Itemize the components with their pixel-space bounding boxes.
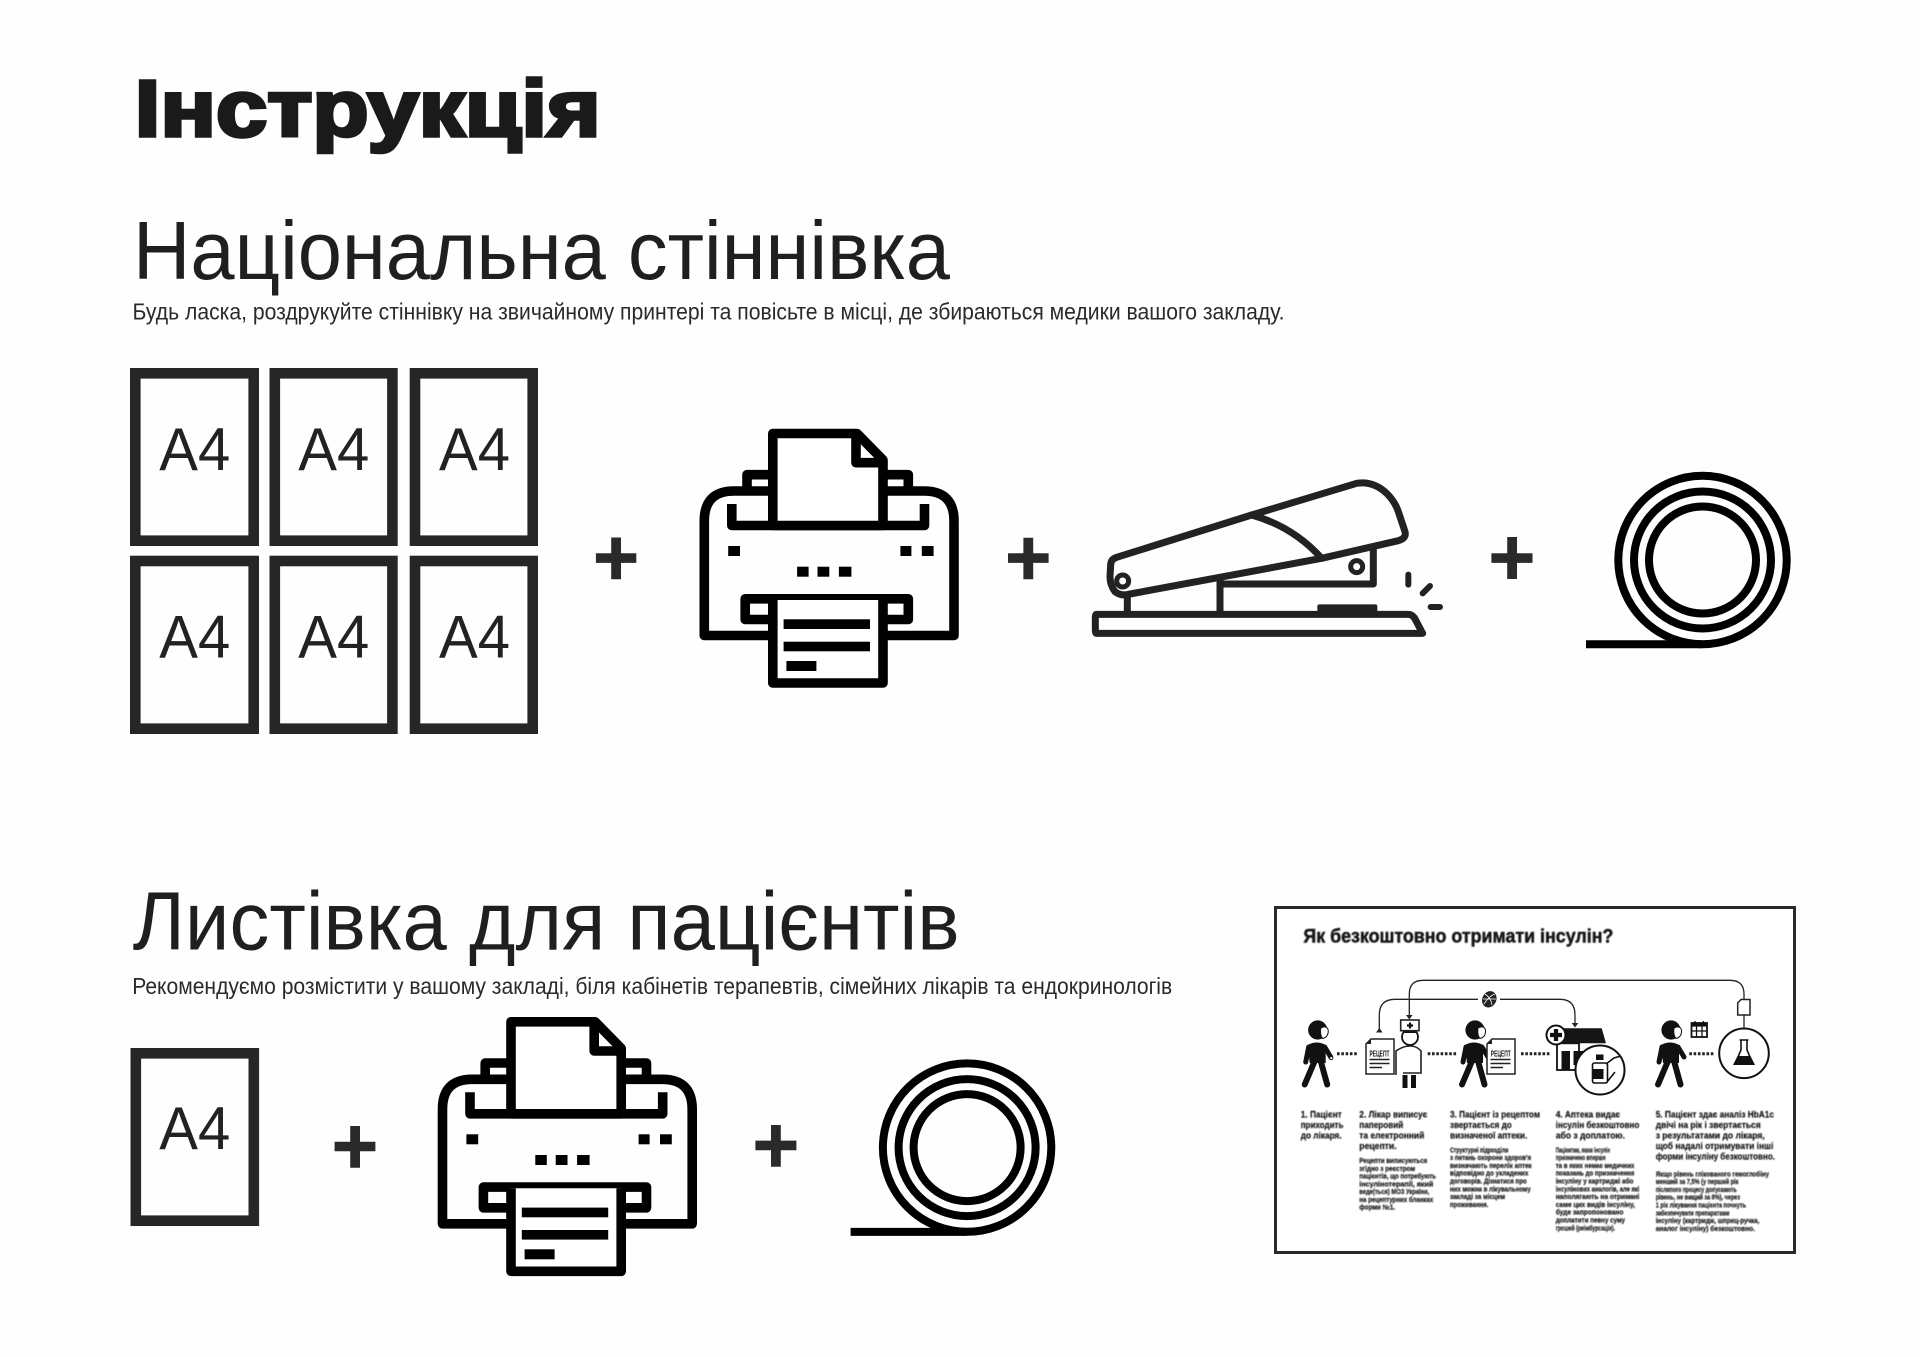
- step 3 text: проживання.: [1450, 1202, 1488, 1209]
- icon: single A4 sheet: [136, 1053, 254, 1221]
- icon group: six A4 sheets: A4: [298, 604, 369, 671]
- preview arrow 2: [1428, 1052, 1457, 1055]
- icon: printer 2: [442, 1022, 692, 1271]
- preview connector lines: [1376, 980, 1744, 1032]
- step 3 text: з питань охорони здоров'я: [1450, 1155, 1531, 1162]
- preview icon: globe: [1478, 989, 1500, 1010]
- preview icon: document on lab line: [1738, 1000, 1750, 1015]
- title: Інструкція: [135, 64, 601, 153]
- step 3 text: відповідно до укладених: [1450, 1170, 1528, 1178]
- preview arrow 1: [1337, 1052, 1357, 1055]
- icon group: six A4 sheets: A4: [159, 604, 230, 671]
- icon group: six A4 sheets: A4: [439, 604, 510, 671]
- preview icon: pharmacy: [1546, 1026, 1624, 1094]
- step 3 text: [1450, 1108, 1540, 1209]
- preview title: Як безкоштовно отримати інсулін?: [1303, 927, 1613, 948]
- step 2 text: та електронний: [1359, 1130, 1425, 1140]
- panel: leaflet preview: [1276, 908, 1794, 1252]
- step 5 text: 1 рік лікування пацієнта почнуть: [1656, 1202, 1746, 1210]
- step 4 text: наполягають на отримані: [1556, 1193, 1639, 1201]
- step 2 text: форми №1.: [1359, 1204, 1395, 1212]
- icon group: six A4 sheets: A4: [439, 416, 510, 483]
- step 4 text: буде запропоновано: [1556, 1209, 1623, 1217]
- step 4 text: [1556, 1108, 1640, 1232]
- step 1 text: 1. Пацієнт: [1301, 1108, 1342, 1120]
- preview icon: patient 1: [1305, 1020, 1333, 1084]
- step 3 text: 3. Пацієнт із рецептом: [1450, 1108, 1540, 1120]
- step 5 text: забезпечувати препаратами: [1656, 1209, 1729, 1217]
- step 5 text: рівень, не вищий за 8%), через: [1656, 1194, 1740, 1202]
- icon: printer: [704, 434, 954, 683]
- step 4 text: 4. Аптека видає: [1556, 1108, 1620, 1120]
- step 4 text: призначено вперше: [1556, 1155, 1606, 1162]
- step 5 text: інсуліну (картридж, шприц-ручка,: [1656, 1217, 1759, 1225]
- step 3 text: визначають перелік аптек: [1450, 1162, 1532, 1170]
- preview icon: prescription 2: РЕЦЕПТ: [1491, 1048, 1511, 1058]
- step 5 text: Якщо рівень глікованого гемоглобіну: [1656, 1170, 1769, 1178]
- preview icon: prescription 2: [1487, 1039, 1515, 1074]
- icon group: six A4 sheets: [135, 373, 533, 729]
- preview arrow 3: [1521, 1052, 1550, 1055]
- step 5 text: менший за 7,5% (у перший рік: [1656, 1178, 1739, 1186]
- step 3 text: звертається до: [1450, 1119, 1512, 1130]
- step 3 text: визначеної аптеки.: [1450, 1130, 1527, 1140]
- step 5 text: з результатами до лікаря,: [1656, 1130, 1765, 1140]
- step 2 text: рецепти.: [1359, 1140, 1397, 1151]
- step 4 text: інсулін безкоштовно: [1556, 1119, 1640, 1130]
- plus sign 1: [596, 538, 636, 579]
- step 2 text: згідно з реєстром: [1359, 1165, 1415, 1173]
- plus sign 3: [1491, 537, 1532, 579]
- step 5 text: [1656, 1108, 1775, 1233]
- step 5 text: форми інсуліну безкоштовно.: [1656, 1150, 1775, 1162]
- step 4 text: саме цих видів інсуліну,: [1556, 1201, 1635, 1209]
- step 5 text: аналог інсуліну) безкоштовно.: [1656, 1225, 1755, 1233]
- step 2 text: Рецепти виписуються: [1359, 1158, 1427, 1165]
- step 4 text: або з доплатою.: [1556, 1130, 1625, 1140]
- plus sign 5: [755, 1125, 796, 1167]
- step 5 text: післяпого процесу допускають: [1656, 1186, 1737, 1194]
- icon: tape roll: [1586, 476, 1787, 644]
- text: wall poster instruction: Будь ласка, роздрукуйте стіннівку на звичайному принтері та повісьте в місці, де збираються медики вашого закладу.: [132, 298, 1284, 324]
- step 1 text: приходить: [1301, 1119, 1344, 1130]
- preview step texts: [1301, 1108, 1775, 1233]
- step 4 text: грошей (реімбурсація).: [1556, 1224, 1615, 1232]
- step 4 text: та в яких немає медичних: [1556, 1163, 1635, 1170]
- step 3 text: Структурні підрозділи: [1450, 1146, 1508, 1154]
- preview icon: lab flask: [1719, 1028, 1769, 1078]
- step 2 text: інсулінотерапії, який: [1359, 1180, 1433, 1188]
- icon: stapler: [1095, 483, 1440, 633]
- preview icon: prescription 1: РЕЦЕПТ: [1370, 1048, 1390, 1058]
- step 2 text: веде(ться) МОЗ України,: [1359, 1189, 1429, 1196]
- step 2 text: паперовий: [1359, 1119, 1404, 1130]
- plus sign 2: [1008, 538, 1049, 579]
- step 3 text: договорів. Дізнатися про: [1450, 1178, 1527, 1186]
- preview icon: calendar: [1692, 1021, 1707, 1037]
- step 3 text: закладі за місцем: [1450, 1193, 1505, 1201]
- step 2 text: [1359, 1108, 1436, 1212]
- step 4 text: показань до призначення: [1556, 1171, 1634, 1178]
- preview icon: patient 3: [1658, 1020, 1684, 1084]
- step 2 text: пацієнтів, що потребують: [1359, 1172, 1436, 1180]
- text: leaflet recommendation: Рекомендуємо розмістити у вашому закладі, біля кабінетів терапевтів, сімейних лікарів та ендокринологів: [132, 973, 1172, 999]
- icon group: six A4 sheets: A4: [298, 416, 369, 483]
- step 1 text: до лікаря.: [1301, 1130, 1342, 1140]
- heading: national wall poster: Національна стіннівка: [133, 204, 951, 297]
- preview frame: [1276, 908, 1794, 1252]
- step 4 text: доплатити певну суму: [1556, 1218, 1625, 1224]
- step 3 text: них можна в лікувальному: [1450, 1185, 1531, 1193]
- step 5 text: щоб надалі отримувати інші: [1656, 1140, 1773, 1151]
- preview icon: prescription 1: [1366, 1039, 1394, 1074]
- step 1 text: [1301, 1108, 1344, 1140]
- step 4 text: Пацієнтам, яким інсулін: [1556, 1146, 1610, 1154]
- step 5 text: двічі на рік і звертається: [1656, 1119, 1761, 1130]
- step 5 text: 5. Пацієнт здає аналіз HbA1c: [1656, 1108, 1774, 1120]
- step 2 text: на рецептурних бланках: [1359, 1196, 1433, 1204]
- icon: tape roll 2: [851, 1063, 1051, 1232]
- plus sign 4: [335, 1126, 375, 1168]
- heading: leaflet for patients: Листівка для пацієнтів: [133, 874, 960, 967]
- preview icon: doctor: [1396, 1020, 1421, 1088]
- step 4 text: інсуліну у картриджі або: [1556, 1178, 1633, 1186]
- icon: single A4 sheet: A4: [159, 1095, 230, 1162]
- step 2 text: 2. Лікар виписує: [1359, 1108, 1427, 1120]
- preview icon: patient 2: [1462, 1020, 1488, 1084]
- step 4 text: інсулінових аналогів, але які: [1556, 1185, 1639, 1193]
- icon group: six A4 sheets: A4: [159, 416, 230, 483]
- preview arrow 4: [1689, 1052, 1714, 1055]
